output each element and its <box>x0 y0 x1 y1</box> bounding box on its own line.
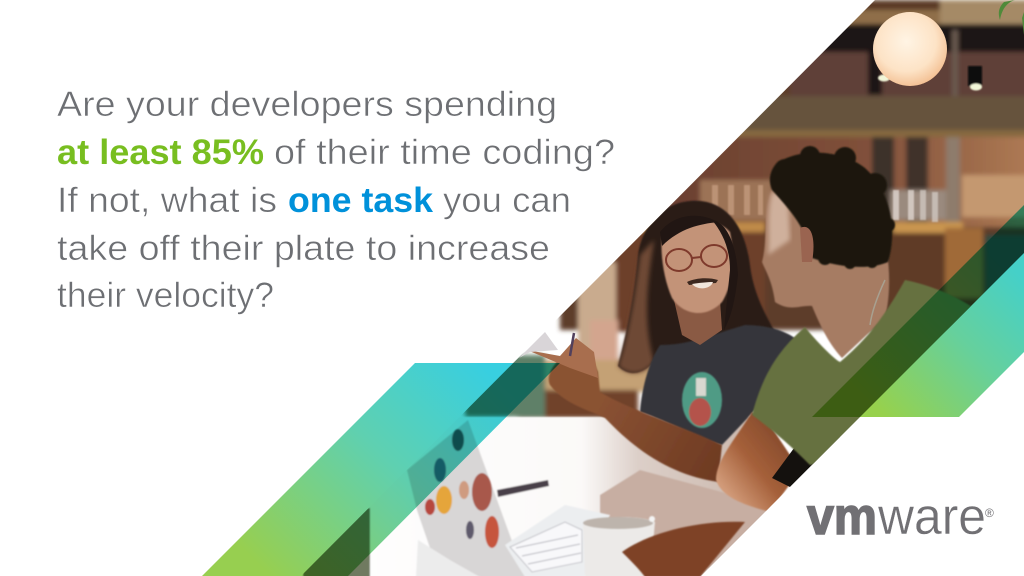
headline question: take off their plate to increase <box>57 229 550 268</box>
hair back <box>618 201 782 373</box>
ear <box>800 227 814 262</box>
hair <box>770 146 895 269</box>
vmware logo: ® <box>985 506 994 520</box>
t-shirt graphic <box>682 372 722 428</box>
face and neck <box>762 180 889 358</box>
dark shadow under shirt <box>772 437 840 487</box>
headline question: Are your developers spending <box>57 85 557 124</box>
person on left: developer with glasses <box>519 201 802 482</box>
left gradient band <box>202 363 560 576</box>
hand on cup <box>622 522 745 576</box>
arm <box>715 412 790 512</box>
notebook and pen <box>519 332 558 358</box>
coffee cup <box>583 516 655 576</box>
bokeh glassware on shelf <box>712 185 938 222</box>
forehead highlight <box>768 192 790 255</box>
headline question <box>57 85 615 315</box>
highlight: one task: one task <box>288 181 434 220</box>
necklace <box>870 280 885 325</box>
t-shirt <box>640 325 802 445</box>
headline question: of their time coding? <box>274 133 615 172</box>
mustache and smile <box>687 278 718 285</box>
vmware logo: vm <box>807 488 877 546</box>
vmware logo <box>807 488 994 546</box>
headline question: you can <box>443 181 571 220</box>
glasses <box>666 245 727 271</box>
right gradient band <box>812 205 1024 417</box>
ceiling lights <box>878 66 982 90</box>
headline question: If not, what is <box>57 181 277 220</box>
pendant lamp <box>873 12 947 86</box>
person on right: developer in green shirt <box>715 145 971 512</box>
cafe background wall <box>465 0 1024 418</box>
laptop with stickers <box>407 420 610 576</box>
table surface <box>300 417 770 576</box>
headline question: their velocity? <box>57 276 274 315</box>
plant leaves <box>999 0 1024 35</box>
forearm and hand <box>549 352 722 482</box>
vmware logo: ware <box>877 488 986 546</box>
photo: developers talking in a cafe <box>300 0 1024 576</box>
neck and face <box>674 300 722 345</box>
highlight: at least 85%: at least 85% <box>57 133 264 172</box>
green shirt <box>752 280 971 466</box>
